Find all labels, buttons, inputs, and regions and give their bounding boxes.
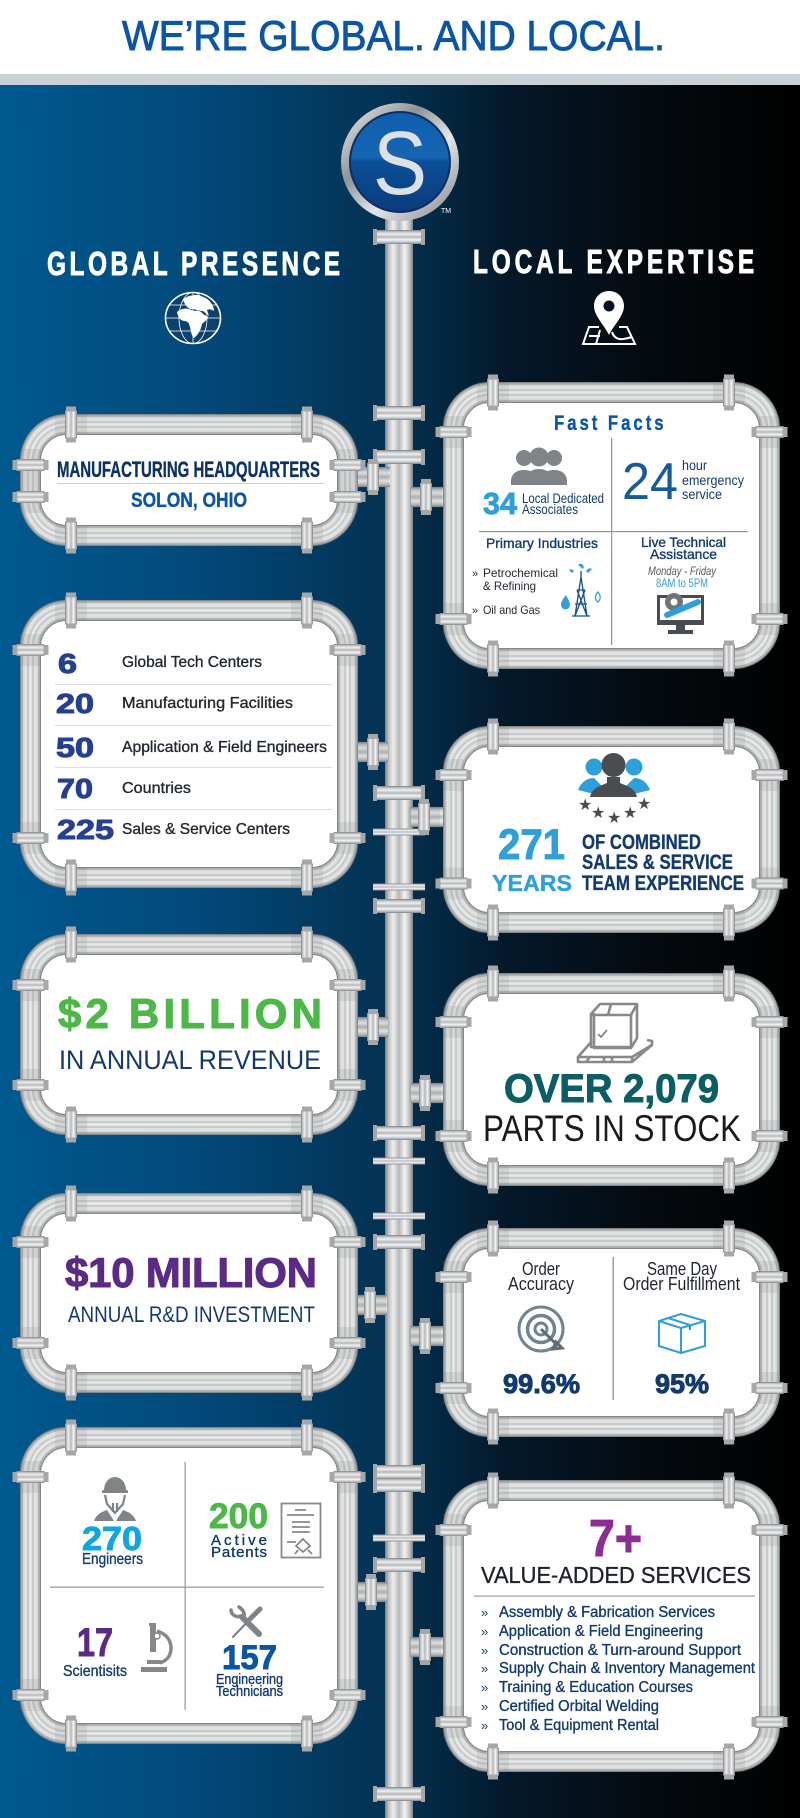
engineers stat <box>82 1520 143 1568</box>
icon: engineer <box>94 1477 136 1521</box>
panel: parts in stock <box>436 966 788 1194</box>
associates stat: Local Dedicated <box>522 490 604 506</box>
stat rows: Application & Field Engineers <box>122 739 327 756</box>
investment figure: $10 MILLION <box>65 1249 317 1296</box>
services list: Construction & Turn-around Support <box>499 1642 742 1659</box>
years figure <box>492 821 572 896</box>
years figure: 271 <box>498 821 565 869</box>
services list: Supply Chain & Inventory Management <box>499 1660 756 1677</box>
stock caption: PARTS IN STOCK <box>483 1108 741 1149</box>
pipe frame <box>436 1472 788 1780</box>
panel: team experience <box>436 718 788 940</box>
panel: team counts <box>12 1420 366 1752</box>
technicians stat <box>216 1639 283 1700</box>
icon: monitor with wrench <box>657 593 704 634</box>
pipe frame <box>12 406 366 554</box>
icon: team with stars: ★ <box>578 797 592 814</box>
primary industries: & Refining <box>483 579 536 593</box>
headquarters label: MANUFACTURING HEADQUARTERS <box>57 457 320 482</box>
services list: Certified Orbital Welding <box>499 1698 659 1715</box>
icon: certificate <box>282 1504 320 1558</box>
emergency service stat: 24 <box>622 453 678 511</box>
icon: team with stars: ★ <box>591 805 605 822</box>
header band <box>0 0 800 85</box>
services list: » <box>481 1718 488 1733</box>
patents stat: 200 <box>209 1497 268 1536</box>
panel: annual revenue <box>12 926 366 1142</box>
services list: » <box>481 1680 488 1695</box>
live technical assistance: Monday - Friday <box>648 566 717 578</box>
title: WE’RE GLOBAL. AND LOCAL. <box>122 12 665 59</box>
pipe frame <box>12 592 366 896</box>
main vertical pipe with flanges <box>373 215 425 1818</box>
location: SOLON, OHIO <box>131 489 247 512</box>
icon: shipping box <box>659 1314 705 1353</box>
pipe frame <box>436 718 788 940</box>
pipe frame <box>436 1220 788 1444</box>
scientists stat: Scientisits <box>63 1663 127 1680</box>
patents stat: Active <box>211 1532 267 1549</box>
services list: » <box>481 1643 488 1658</box>
technicians stat: 157 <box>222 1639 277 1677</box>
order accuracy: 99.6% <box>503 1369 580 1399</box>
services list: Assembly & Fabrication Services <box>499 1604 715 1621</box>
panel: research investment <box>12 1186 366 1400</box>
emergency service stat: service <box>682 487 722 502</box>
patents stat: Patents <box>211 1544 267 1561</box>
primary industries: » <box>472 568 478 580</box>
primary industries: Petrochemical <box>483 566 558 580</box>
primary industries: » <box>472 605 478 617</box>
pipe frame <box>12 1186 366 1400</box>
fast facts heading: Fast Facts <box>554 412 664 436</box>
services heading: VALUE-ADDED SERVICES <box>481 1562 751 1588</box>
stat rows: 50 <box>56 732 94 763</box>
panel: value-added services <box>436 1472 788 1780</box>
revenue figure: $2 BILLION <box>58 990 322 1037</box>
heading: local expertise: LOCAL EXPERTISE <box>473 245 754 281</box>
panel: global stats <box>12 592 366 896</box>
stat rows: 20 <box>56 688 94 719</box>
stat rows: Global Tech Centers <box>122 654 262 671</box>
associates stat: 34 <box>483 486 518 521</box>
panel: fast facts <box>436 374 788 676</box>
experience caption: SALES & SERVICE <box>582 851 733 874</box>
stat rows: Manufacturing Facilities <box>122 695 293 712</box>
engineers stat: 270 <box>82 1520 142 1557</box>
services list: Tool & Equipment Rental <box>499 1717 659 1734</box>
live technical assistance: Assistance <box>650 546 717 562</box>
primary industries: Oil and Gas <box>483 603 540 617</box>
panel: order metrics <box>436 1220 788 1444</box>
live technical assistance <box>641 534 726 590</box>
live technical assistance: Live Technical <box>641 534 726 550</box>
same day fulfillment <box>623 1259 740 1399</box>
primary industries <box>472 535 598 617</box>
technicians stat: Technicians <box>216 1683 283 1700</box>
services list: Application & Field Engineering <box>499 1623 703 1640</box>
experience caption <box>582 831 744 895</box>
same day fulfillment: Order Fulfillment <box>623 1274 740 1294</box>
icon: team with stars: ★ <box>637 796 651 813</box>
live technical assistance: 8AM to 5PM <box>656 578 708 590</box>
icon: team with stars <box>578 753 651 827</box>
same day fulfillment: Same Day <box>647 1259 717 1279</box>
icon: three associates <box>511 448 567 485</box>
logo badge <box>341 103 459 221</box>
stat rows: Countries <box>122 780 191 797</box>
order accuracy: Order <box>522 1259 560 1279</box>
stat rows: 225 <box>57 814 114 845</box>
revenue caption: IN ANNUAL REVENUE <box>59 1045 321 1075</box>
icon: microscope <box>141 1623 171 1672</box>
patents stat <box>209 1497 268 1561</box>
emergency service stat: hour <box>682 458 707 473</box>
pipe frame <box>436 374 788 676</box>
connector pipes <box>354 459 445 1665</box>
icon: target <box>519 1307 563 1351</box>
icon: oil derrick <box>561 564 600 616</box>
services list: » <box>481 1605 488 1620</box>
services list: Training & Education Courses <box>499 1679 693 1696</box>
scientists stat <box>63 1621 127 1680</box>
pipe frame <box>12 926 366 1142</box>
experience caption: OF COMBINED <box>582 831 701 854</box>
services count: 7+ <box>589 1510 642 1568</box>
services list: » <box>481 1661 488 1676</box>
years figure: YEARS <box>492 870 572 896</box>
experience caption: TEAM EXPERIENCE <box>582 872 744 895</box>
logo badge: S <box>373 114 427 214</box>
order accuracy: Accuracy <box>508 1274 574 1294</box>
scientists stat: 17 <box>77 1621 113 1665</box>
primary industries: Primary Industries <box>486 535 598 551</box>
pipe frame <box>436 966 788 1194</box>
icon: globe <box>166 292 220 344</box>
investment caption: ANNUAL R&D INVESTMENT <box>68 1302 315 1327</box>
stat rows: 6 <box>58 648 77 679</box>
panel: manufacturing headquarters <box>12 406 366 554</box>
logo badge: TM <box>441 208 451 215</box>
icon: map pin <box>583 291 635 344</box>
associates stat: Associates <box>522 501 578 517</box>
emergency service stat: emergency <box>682 473 744 488</box>
services list <box>481 1604 756 1734</box>
stat rows: 70 <box>57 773 93 804</box>
stock figure: OVER 2,079 <box>504 1067 719 1111</box>
order accuracy <box>503 1259 580 1399</box>
pipe frame <box>12 1420 366 1752</box>
services list: » <box>481 1624 488 1639</box>
heading: global presence: GLOBAL PRESENCE <box>47 247 340 283</box>
same day fulfillment: 95% <box>655 1369 709 1399</box>
associates stat <box>483 486 604 521</box>
technicians stat: Engineering <box>216 1671 283 1688</box>
services list: » <box>481 1699 488 1714</box>
icon: box on pallet <box>578 1004 652 1062</box>
icon: team with stars: ★ <box>607 810 621 827</box>
stat rows <box>55 648 332 845</box>
engineers stat: Engineers <box>82 1551 143 1568</box>
icon: tools <box>231 1607 260 1637</box>
emergency service stat <box>622 453 744 511</box>
stat rows: Sales & Service Centers <box>122 821 290 838</box>
icon: team with stars: ★ <box>623 805 637 822</box>
